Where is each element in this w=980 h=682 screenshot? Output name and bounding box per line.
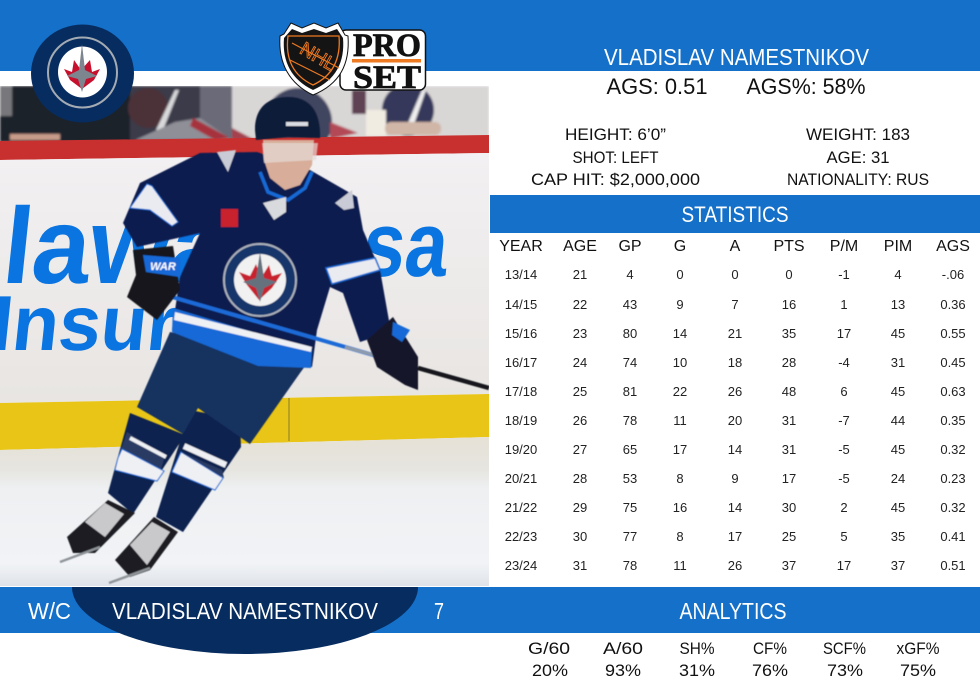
season 13/14: 0 — [731, 267, 739, 282]
season 14/15 — [505, 297, 966, 312]
right glove — [367, 317, 418, 390]
player details left — [531, 125, 700, 189]
Pro Set NHL logo — [280, 23, 426, 96]
AGS summary — [606, 74, 866, 99]
season 22/23: 35 — [891, 529, 905, 544]
season 16/17: 0.45 — [940, 355, 966, 370]
statistics table — [499, 238, 970, 573]
season 13/14: 4 — [626, 267, 634, 282]
analytics values: 76% — [752, 661, 788, 680]
season 19/20: -5 — [838, 442, 850, 457]
season 16/17: 18 — [728, 355, 742, 370]
left skate — [67, 500, 135, 553]
season 13/14: 0 — [785, 267, 793, 282]
season 23/24: 11 — [673, 558, 687, 573]
Pro Set NHL logo: PRO — [353, 28, 421, 64]
season 14/15: 22 — [573, 297, 587, 312]
player figure — [60, 97, 489, 583]
season 16/17: 16/17 — [505, 355, 537, 370]
season 17/18: 26 — [728, 384, 742, 399]
table header: GP — [618, 238, 642, 255]
season 19/20: 19/20 — [505, 442, 537, 457]
season 14/15: 16 — [782, 297, 796, 312]
season 18/19: 78 — [623, 413, 637, 428]
ice surface — [0, 437, 489, 586]
team logo — [31, 24, 134, 122]
statistics heading band: STATISTICS — [682, 202, 788, 227]
season 21/22: 29 — [573, 500, 587, 515]
season 16/17 — [505, 355, 966, 370]
season 13/14: 21 — [573, 267, 587, 282]
player photo — [0, 84, 489, 586]
season 19/20: 0.32 — [940, 442, 966, 457]
left glove — [127, 246, 180, 320]
season 21/22: 75 — [623, 500, 637, 515]
season 17/18: 6 — [840, 384, 848, 399]
season 18/19: 11 — [673, 413, 687, 428]
player details right: AGE: 31 — [826, 148, 890, 167]
white band — [134, 71, 280, 86]
season 23/24: 23/24 — [505, 558, 537, 573]
analytics values: 31% — [679, 661, 715, 680]
player details left: SHOT: LEFT — [572, 148, 658, 167]
season 13/14: 13/14 — [505, 267, 537, 282]
season 15/16: 17 — [837, 326, 851, 341]
season 23/24: 17 — [837, 558, 851, 573]
jersey hem stripes — [172, 308, 312, 368]
season 15/16 — [505, 326, 966, 341]
season 13/14: 4 — [894, 267, 902, 282]
season 22/23 — [505, 529, 966, 544]
red rail — [0, 135, 489, 160]
pants — [137, 332, 311, 444]
season 23/24: 0.51 — [940, 558, 966, 573]
season 14/15: 14/15 — [505, 297, 537, 312]
analytics table — [528, 639, 940, 680]
jersey patch — [221, 209, 238, 227]
table header: AGS — [936, 238, 970, 255]
Pro Set NHL logo: SET — [353, 60, 421, 96]
season 18/19: -7 — [838, 413, 850, 428]
NHL shield — [280, 23, 348, 95]
season 18/19: 0.35 — [940, 413, 966, 428]
season 21/22: 30 — [782, 500, 796, 515]
analytics values: 93% — [605, 661, 641, 680]
AGS summary: AGS%: 58% — [746, 74, 866, 99]
player name heading: VLADISLAV NAMESTNIKOV — [604, 44, 870, 70]
navy name plate — [72, 587, 418, 654]
bottom blue band — [0, 587, 980, 633]
analytics values: 75% — [900, 661, 936, 680]
season 23/24: 37 — [891, 558, 905, 573]
crowd behind the glass — [0, 86, 489, 141]
season 18/19: 20 — [728, 413, 742, 428]
table header: G — [674, 238, 686, 255]
table header — [499, 238, 970, 255]
season 19/20: 17 — [673, 442, 687, 457]
table header: P/M — [830, 238, 858, 255]
board advertising lettering — [0, 204, 446, 351]
season 14/15: 7 — [731, 297, 739, 312]
season 20/21: 20/21 — [505, 471, 537, 486]
season 16/17: 31 — [891, 355, 905, 370]
stick — [172, 297, 380, 357]
season 18/19: 26 — [573, 413, 587, 428]
top blue banner — [0, 0, 980, 71]
season 18/19: 31 — [782, 413, 796, 428]
player details right: WEIGHT: 183 — [806, 125, 910, 144]
season 21/22: 16 — [673, 500, 687, 515]
season 22/23: 17 — [728, 529, 742, 544]
season 20/21: 8 — [676, 471, 684, 486]
season 17/18: 22 — [673, 384, 687, 399]
season 18/19 — [505, 413, 966, 428]
season 20/21: 24 — [891, 471, 905, 486]
analytics labels: A/60 — [603, 639, 643, 658]
season 19/20: 65 — [623, 442, 637, 457]
yellow kick plate — [0, 394, 489, 450]
collar badge — [263, 197, 286, 220]
season 16/17: 10 — [673, 355, 687, 370]
table header: AGE — [563, 238, 597, 255]
analytics values: 20% — [532, 661, 568, 680]
season 20/21: 0.23 — [940, 471, 966, 486]
season 17/18: 45 — [891, 384, 905, 399]
season 21/22: 0.32 — [940, 500, 966, 515]
season 22/23: 25 — [782, 529, 796, 544]
season 20/21: 28 — [573, 471, 587, 486]
season 14/15: 9 — [676, 297, 684, 312]
season 22/23: 77 — [623, 529, 637, 544]
season 15/16: 14 — [673, 326, 687, 341]
table header: A — [730, 238, 741, 255]
right leg — [156, 410, 241, 532]
player details right: NATIONALITY: RUS — [787, 170, 929, 189]
player figure: WAR — [150, 261, 176, 273]
season 20/21: 17 — [782, 471, 796, 486]
shoulder stripes — [130, 184, 178, 226]
season 17/18: 25 — [573, 384, 587, 399]
player details right — [787, 125, 929, 189]
shoulder logos — [217, 150, 236, 172]
analytics labels: xGF% — [896, 639, 940, 658]
season 15/16: 80 — [623, 326, 637, 341]
season 19/20: 31 — [782, 442, 796, 457]
season 22/23: 0.41 — [940, 529, 966, 544]
season 21/22: 14 — [728, 500, 742, 515]
season 22/23: 30 — [573, 529, 587, 544]
left leg — [108, 413, 185, 514]
season 15/16: 0.55 — [940, 326, 966, 341]
season 23/24: 78 — [623, 558, 637, 573]
season 13/14: -.06 — [942, 267, 964, 282]
season 20/21: 9 — [731, 471, 739, 486]
season 22/23: 8 — [676, 529, 684, 544]
season 17/18: 48 — [782, 384, 796, 399]
season 17/18: 81 — [623, 384, 637, 399]
face and neck — [263, 140, 314, 190]
season 21/22 — [505, 500, 966, 515]
season 22/23: 22/23 — [505, 529, 537, 544]
season 17/18 — [505, 384, 966, 399]
season 15/16: 21 — [728, 326, 742, 341]
season 19/20 — [505, 442, 966, 457]
player details left: HEIGHT: 6’0” — [565, 125, 666, 144]
season 15/16: 35 — [782, 326, 796, 341]
season 15/16: 15/16 — [505, 326, 537, 341]
helmet — [255, 97, 320, 140]
analytics heading: ANALYTICS — [680, 598, 786, 624]
season 14/15: 13 — [891, 297, 905, 312]
season 16/17: 28 — [782, 355, 796, 370]
board advertising lettering: sa — [358, 192, 454, 296]
position label: W/C — [28, 598, 71, 624]
analytics values — [532, 661, 936, 680]
season 15/16: 23 — [573, 326, 587, 341]
table header: PTS — [773, 238, 805, 255]
season 23/24 — [505, 558, 966, 573]
analytics labels: SH% — [680, 639, 714, 658]
season 19/20: 45 — [891, 442, 905, 457]
analytics labels: CF% — [753, 639, 787, 658]
season 20/21: 53 — [623, 471, 637, 486]
season 14/15: 1 — [840, 297, 848, 312]
season 16/17: -4 — [838, 355, 850, 370]
jersey number: 7 — [434, 598, 444, 624]
season 16/17: 74 — [623, 355, 637, 370]
season 19/20: 14 — [728, 442, 742, 457]
statistics heading band — [490, 195, 980, 233]
season 13/14: -1 — [838, 267, 850, 282]
season 20/21 — [505, 471, 966, 486]
season 21/22: 2 — [840, 500, 848, 515]
season 15/16: 45 — [891, 326, 905, 341]
analytics labels — [528, 639, 940, 658]
season 21/22: 21/22 — [505, 500, 537, 515]
season 21/22: 45 — [891, 500, 905, 515]
right skate — [115, 517, 178, 577]
player details left: CAP HIT: $2,000,000 — [531, 170, 700, 189]
sleeve stripes — [326, 258, 380, 284]
board advertising lettering: lawa — [0, 185, 236, 306]
NHL shield: NHL — [296, 39, 339, 76]
season 18/19: 18/19 — [505, 413, 537, 428]
season 14/15: 0.36 — [940, 297, 966, 312]
season 23/24: 37 — [782, 558, 796, 573]
season 18/19: 44 — [891, 413, 905, 428]
collar — [260, 172, 312, 200]
season 20/21: -5 — [838, 471, 850, 486]
table header: PIM — [884, 238, 912, 255]
jersey body — [123, 152, 391, 367]
analytics values: 73% — [827, 661, 863, 680]
season 14/15: 43 — [623, 297, 637, 312]
season 22/23: 5 — [840, 529, 848, 544]
jersey crest — [224, 244, 296, 316]
season 19/20: 27 — [573, 442, 587, 457]
analytics labels: SCF% — [823, 639, 866, 658]
name plate text: VLADISLAV NAMESTNIKOV — [112, 598, 379, 624]
AGS summary: AGS: 0.51 — [606, 74, 708, 99]
season 13/14: 0 — [676, 267, 684, 282]
table header: YEAR — [499, 238, 543, 255]
season 16/17: 24 — [573, 355, 587, 370]
season 17/18: 17/18 — [505, 384, 537, 399]
season 23/24: 31 — [573, 558, 587, 573]
season 13/14 — [505, 267, 964, 282]
dasher board — [0, 153, 489, 403]
season 23/24: 26 — [728, 558, 742, 573]
analytics labels: G/60 — [528, 639, 570, 658]
season 17/18: 0.63 — [940, 384, 966, 399]
